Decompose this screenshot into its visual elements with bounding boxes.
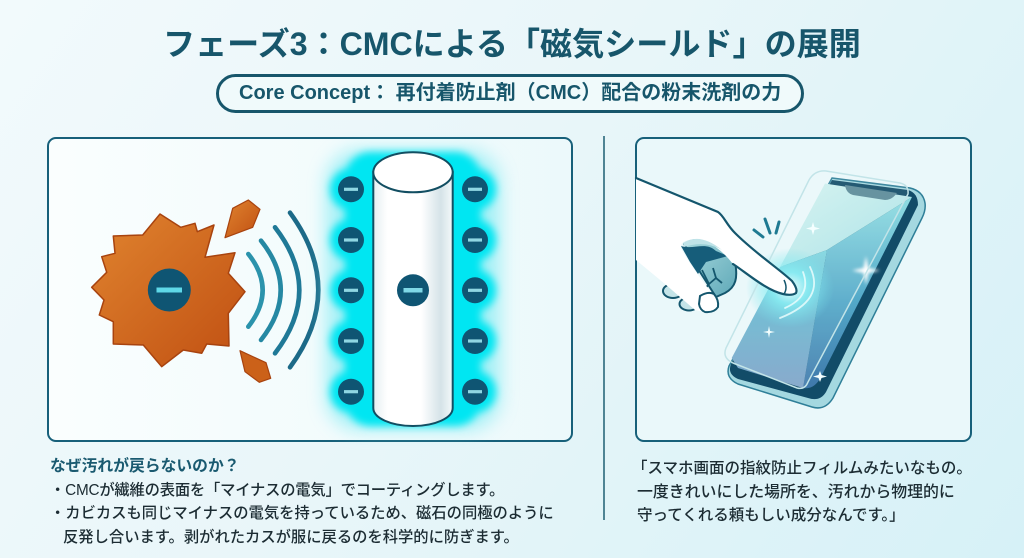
panel: magnetic shield diagram — [47, 137, 573, 442]
bullet two: ・カビカスも同じマイナスの電気を持っているため、磁石の同極のように — [50, 505, 554, 522]
screen facet left — [732, 250, 827, 388]
sparkle small lower — [763, 326, 775, 338]
explanation heading: なぜ汚れが戻らないのか？ — [50, 458, 240, 475]
protective film — [725, 171, 908, 388]
knuckle lines — [702, 268, 722, 290]
panel: smartphone analogy — [635, 137, 972, 442]
dirt fragment upper — [225, 200, 260, 238]
title: フェーズ3：CMCによる「磁気シールド」の展開 — [163, 26, 861, 62]
finger nail — [784, 280, 786, 294]
smartphone — [725, 171, 925, 408]
bullet two continued: 反発し合います。剥がれたカスが服に戻るのを科学的に防ぎます。 — [63, 529, 519, 546]
touch glow — [746, 248, 834, 328]
tap marks — [754, 219, 779, 237]
repulsion waves — [248, 213, 318, 367]
sparkle small upper — [806, 222, 820, 235]
screen facet top — [780, 184, 912, 267]
left explanation text — [50, 457, 554, 546]
cyan glow — [326, 150, 500, 430]
phone body — [728, 178, 925, 408]
core concept pill — [216, 74, 804, 113]
quote line three: 守ってくれる頼もしい成分なんです。」 — [637, 507, 905, 524]
dirt particle — [92, 214, 245, 367]
quote line two: 一度きれいにした場所を、汚れから物理的に — [637, 484, 955, 501]
sparkle corner — [813, 371, 827, 382]
fiber cylinder — [373, 152, 453, 426]
thumb — [699, 293, 718, 312]
curled finger lower — [680, 298, 698, 310]
hand outline — [636, 178, 796, 295]
negative charges right — [462, 176, 488, 405]
sparkle large — [852, 256, 880, 285]
fiber negative charge — [397, 274, 429, 306]
phone screen — [732, 184, 912, 388]
divider — [603, 136, 605, 520]
touch ripples — [780, 267, 814, 318]
bullet one: ・CMCが繊維の表面を「マイナスの電気」でコーティングします。 — [50, 482, 504, 499]
screen facet right — [803, 197, 912, 388]
right quote text — [632, 460, 972, 524]
dirt negative charge — [148, 268, 191, 312]
soft shading above fist — [683, 239, 722, 250]
pointing finger and back of hand — [636, 178, 796, 312]
palm shadow — [681, 246, 728, 274]
negative charges left — [338, 176, 364, 405]
fist — [684, 239, 736, 297]
hand — [636, 178, 796, 312]
curled finger upper — [663, 284, 683, 298]
dirt fragment lower — [240, 351, 271, 382]
quote line one: 「スマホ画面の指紋防止フィルムみたいなもの。 — [632, 460, 972, 477]
phone notch — [845, 185, 897, 200]
pill text: Core Concept： 再付着防止剤（CMC）配合の粉末洗剤の力 — [239, 82, 781, 104]
